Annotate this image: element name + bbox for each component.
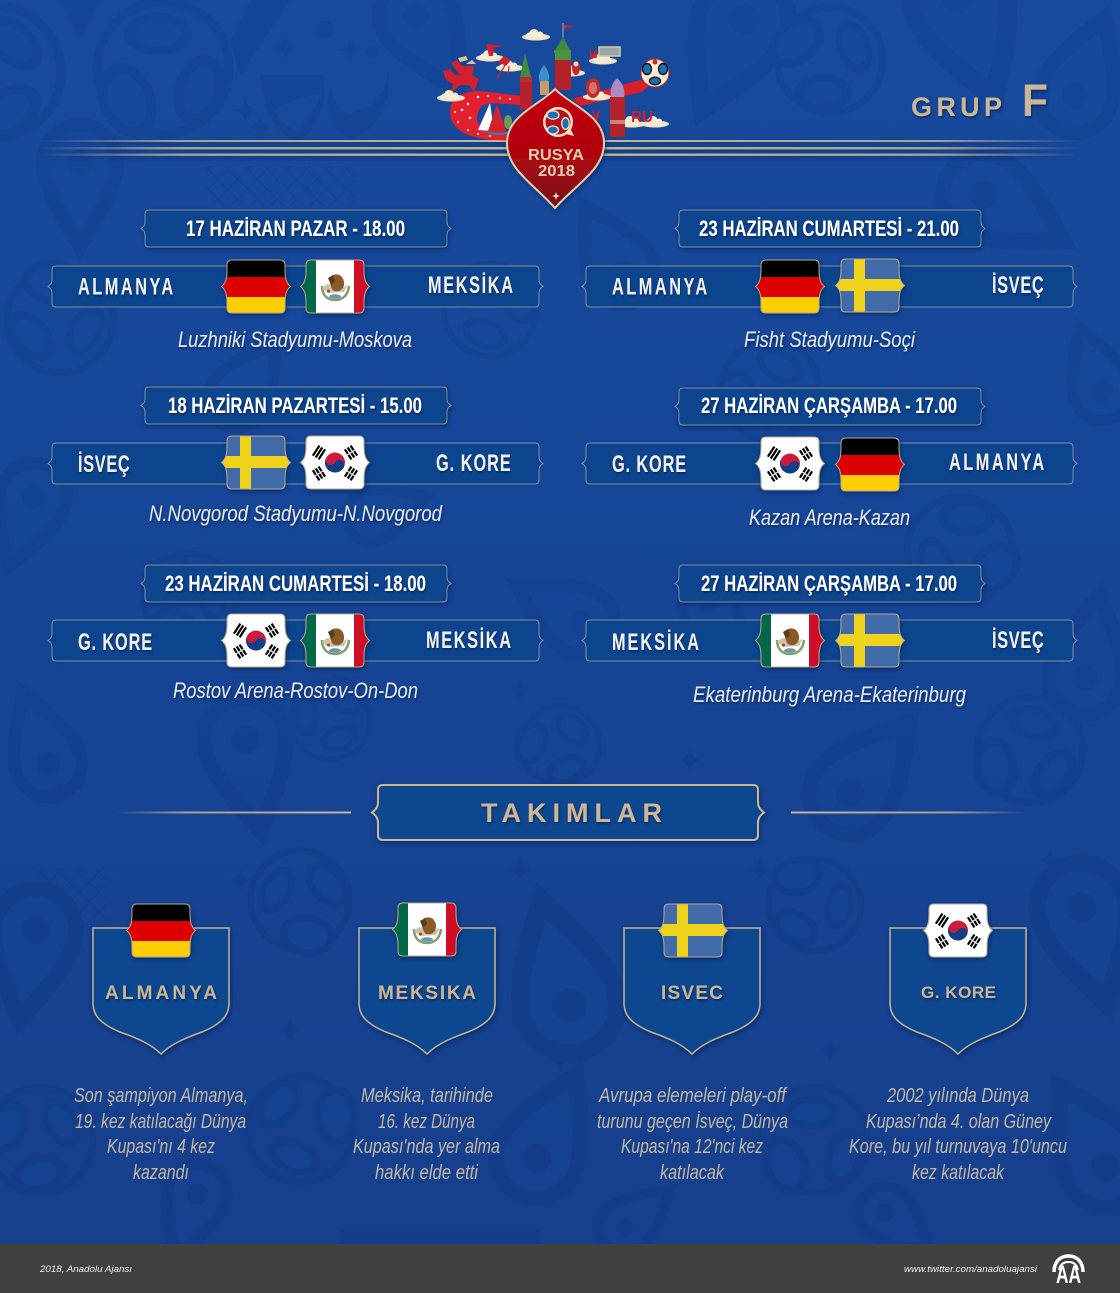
team card: İsveç: ISVEC — [661, 983, 723, 1004]
text: Meksika description: Kupası'nda yer alma — [353, 1136, 500, 1158]
icon: red ribbon ring — [450, 80, 650, 140]
match: İsveç - G. Kore: N.Novgorod Stadyumu-N.Novgorod — [149, 501, 443, 526]
text: RUSYA: RUSYA — [528, 147, 584, 164]
match: G. Kore - Almanya: 27 HAZİRAN ÇARŞAMBA - 17.00 — [701, 393, 957, 418]
match: G. Kore - Meksika: G. KORE — [78, 629, 152, 656]
text: twitter url: www.twitter.com/anadoluajansi — [904, 1264, 1038, 1275]
text: Almanya description — [74, 1085, 248, 1184]
icon: matryoshka — [572, 61, 580, 75]
match: İsveç - G. Kore: İSVEÇ — [78, 451, 130, 478]
icon: AA logo: AA — [1056, 1261, 1081, 1289]
text: Almanya description: Kupası'nı 4 kez — [107, 1136, 215, 1158]
match: Almanya - Meksika: 17 HAZİRAN PAZAR - 18.00 — [186, 216, 405, 241]
icon: satellite — [486, 44, 511, 78]
match: Almanya - İsveç: 23 HAZİRAN CUMARTESİ - 21.00 — [699, 216, 959, 241]
icon: left tower — [520, 53, 532, 110]
icon: central tower — [554, 23, 575, 90]
text: Meksika description: Meksika, tarihinde — [361, 1085, 493, 1107]
text: İsveç description: turunu geçen İsveç, Dünya — [597, 1111, 788, 1133]
icon: emblem ball — [543, 107, 574, 137]
match: Almanya - Meksika: Luzhniki Stadyumu-Moskova — [178, 327, 412, 352]
text: Almanya description: kazandı — [133, 1162, 189, 1184]
match: Almanya - Meksika — [48, 210, 543, 352]
text: İsveç description: katılacak — [660, 1162, 725, 1184]
match: Meksika - İsveç: MEKSİKA — [612, 629, 699, 656]
text: credit: 2018, Anadolu Ajansı — [39, 1264, 132, 1275]
text: Meksika description: hakkı elde etti — [375, 1162, 478, 1184]
match: Almanya - İsveç — [582, 210, 1077, 352]
text: İsveç description — [597, 1085, 788, 1184]
footer — [0, 1244, 1120, 1293]
team card: G. Kore — [849, 904, 1067, 1184]
team card: İsveç — [597, 904, 788, 1184]
icon: clouds — [437, 29, 669, 128]
icon: sails — [478, 103, 512, 135]
text: RU: RU — [631, 109, 653, 126]
match: Meksika - İsveç: 27 HAZİRAN ÇARŞAMBA - 17.00 — [701, 571, 957, 596]
match: Almanya - İsveç: ALMANYA — [612, 273, 707, 300]
text: G. Kore description — [849, 1085, 1067, 1184]
header rules — [40, 140, 1078, 156]
match: Almanya - İsveç: İSVEÇ — [992, 272, 1044, 299]
match: Meksika - İsveç: Ekaterinburg Arena-Ekaterinburg — [693, 682, 967, 707]
match: Almanya - İsveç: Fisht Stadyumu-Soçi — [744, 327, 916, 352]
team card: Meksika: MEKSIKA — [378, 983, 476, 1004]
text: Almanya description: 19. kez katılacağı Dünya — [75, 1111, 246, 1133]
icon: football — [641, 59, 669, 87]
match: İsveç - G. Kore: G. KORE — [436, 450, 511, 477]
text: Almanya description: Son şampiyon Almanya, — [74, 1085, 248, 1107]
heading: GRUP F — [911, 75, 1048, 126]
section heading: Takımlar — [115, 785, 1025, 840]
text: Meksika description: 16. kez Dünya — [378, 1111, 475, 1133]
emblem: Rusya 2018 — [507, 89, 604, 208]
text: G. Kore description: Kore, bu yıl turnuvaya 10'uncu — [849, 1136, 1067, 1158]
icon: right tower — [610, 78, 625, 137]
icon: blue dome — [539, 65, 549, 95]
match: G. Kore - Meksika: Rostov Arena-Rostov-On-Don — [173, 678, 418, 703]
heading: GRUP F: GRUP — [911, 92, 1002, 122]
icon: star — [552, 192, 560, 200]
team card: Meksika — [353, 903, 500, 1184]
text: Meksika description — [353, 1085, 500, 1184]
match: G. Kore - Meksika: MEKSİKA — [426, 627, 511, 654]
match: G. Kore - Almanya: G. KORE — [612, 451, 686, 478]
match: Meksika - İsveç — [582, 565, 1077, 707]
match: G. Kore - Almanya: Kazan Arena-Kazan — [749, 505, 910, 530]
match: Almanya - Meksika: ALMANYA — [78, 273, 173, 300]
heading: GRUP F: F — [1022, 75, 1048, 126]
match: İsveç - G. Kore — [48, 387, 543, 526]
icon: AA logo — [1054, 1256, 1083, 1289]
match: G. Kore - Meksika: 23 HAZİRAN CUMARTESİ - 18.00 — [165, 571, 426, 596]
text: G. Kore description: kez katılacak — [912, 1162, 1005, 1184]
match: İsveç - G. Kore: 18 HAZİRAN PAZARTESİ - 15.00 — [168, 393, 422, 418]
section heading: Takımlar: TAKIMLAR — [481, 798, 662, 828]
match: Meksika - İsveç: İSVEÇ — [992, 627, 1044, 654]
text: İsveç description: Avrupa elemeleri play-off — [598, 1085, 788, 1107]
text: 2018: 2018 — [538, 163, 575, 180]
text: İsveç description: Kupası'na 12'nci kez — [621, 1136, 763, 1158]
match: G. Kore - Almanya: ALMANYA — [949, 449, 1044, 476]
icon: horses — [443, 56, 479, 94]
match: Almanya - Meksika: MEKSİKA — [428, 272, 513, 299]
team card: Almanya: ALMANYA — [105, 983, 217, 1004]
icon: goal — [590, 47, 620, 58]
team card: Almanya — [74, 904, 248, 1184]
icon: egg — [586, 78, 600, 98]
team card: G. Kore: G. KORE — [921, 983, 996, 1002]
icon: player — [592, 108, 600, 120]
text: G. Kore description: Kupası’nda 4. olan Güney — [866, 1111, 1052, 1133]
match: G. Kore - Meksika — [48, 565, 543, 703]
text: G. Kore description: 2002 yılında Dünya — [886, 1085, 1029, 1107]
illustration: Russia landmarks and ribbon — [437, 23, 669, 140]
match: G. Kore - Almanya — [582, 388, 1077, 530]
